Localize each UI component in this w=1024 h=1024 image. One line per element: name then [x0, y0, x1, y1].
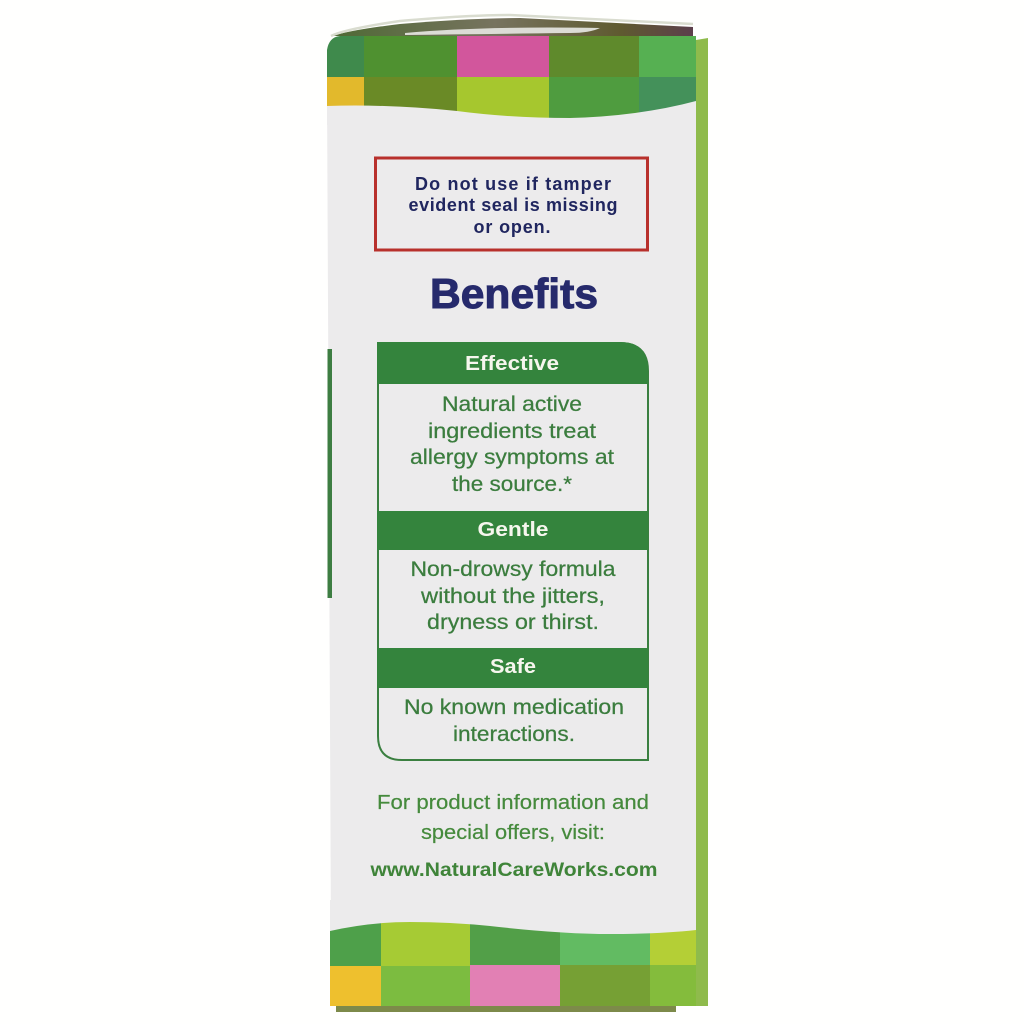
- text: Safe: [404, 696, 624, 746]
- text: Safe: No known medication: [404, 696, 624, 719]
- warning text: Do not use if tamper: [415, 174, 611, 194]
- text: Effective: Natural active: [442, 393, 582, 416]
- text: Effective: the source.*: [452, 473, 572, 496]
- white front panel: [327, 90, 696, 940]
- warning box: [376, 158, 648, 250]
- left edge green stripe: [328, 349, 332, 598]
- footer text: special offers, visit:: [421, 822, 605, 844]
- product box: [327, 15, 708, 1012]
- footer text: For product information and: [377, 792, 649, 814]
- right side strip: [696, 38, 708, 1006]
- text: Effective: [410, 393, 614, 496]
- header: Gentle: Gentle: [478, 519, 548, 541]
- benefits table: [377, 342, 648, 760]
- heading: Benefits: Benefits: [430, 270, 598, 317]
- text: Gentle: without the jitters,: [420, 585, 605, 608]
- footer text: [369, 792, 658, 881]
- top colour tiles: [327, 36, 696, 118]
- bottom panel wave: [330, 900, 696, 934]
- text: Effective: allergy symptoms at: [410, 446, 614, 469]
- top panel wave: [327, 101, 696, 125]
- text: Gentle: [410, 558, 616, 634]
- warning text: or open.: [474, 217, 550, 237]
- text: Gentle: dryness or thirst.: [427, 611, 599, 634]
- text: Safe: interactions.: [453, 723, 575, 746]
- header: Safe: [377, 648, 648, 688]
- header: Safe: Safe: [490, 656, 536, 678]
- header: Effective: Effective: [465, 353, 559, 375]
- bottom colour tiles: [330, 915, 696, 1012]
- website url: www.NaturalCareWorks.com: [369, 860, 658, 881]
- text: Gentle: Non-drowsy formula: [410, 558, 616, 581]
- text: Effective: ingredients treat: [428, 420, 596, 443]
- warning text: evident seal is missing: [408, 195, 618, 215]
- header: Effective: [377, 342, 648, 384]
- box top flap: [331, 15, 693, 36]
- header: Gentle: [377, 511, 648, 550]
- warning text: [408, 174, 618, 237]
